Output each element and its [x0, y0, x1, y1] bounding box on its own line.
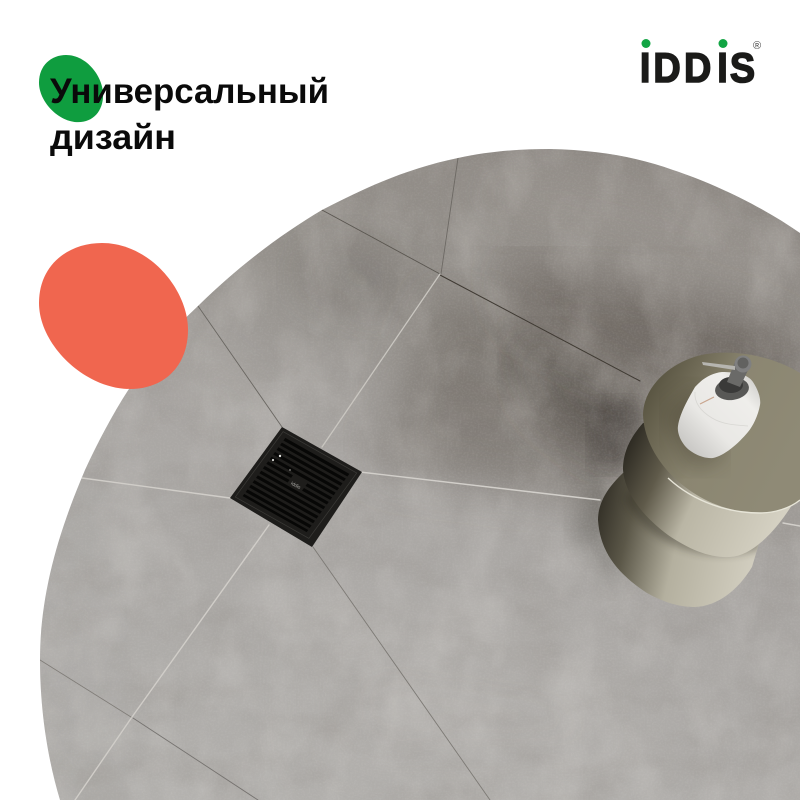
registered mark: ®	[753, 40, 761, 52]
tile joints	[40, 158, 800, 800]
soap dispenser bottle	[678, 356, 760, 458]
concrete texture	[74, 378, 709, 800]
decorative coral blob	[39, 243, 188, 389]
pump stem	[727, 359, 750, 387]
title: дизайн	[50, 118, 176, 157]
drain logo: iddis	[290, 481, 302, 491]
title: Универсальный	[50, 72, 329, 111]
stool lower body	[598, 472, 758, 607]
decorative green blob	[39, 55, 103, 122]
logo: IDDIS: IDDIS	[640, 45, 755, 91]
icon: black square floor drain	[230, 427, 362, 547]
stool middle body	[623, 420, 800, 557]
pump collar	[714, 376, 750, 402]
shadow zones on floor	[304, 237, 800, 586]
logo green dots	[642, 39, 728, 48]
stool	[590, 350, 800, 615]
pump head	[734, 356, 752, 372]
stool top disc	[640, 350, 800, 515]
pump nozzle	[702, 362, 735, 370]
bottle body	[678, 372, 760, 458]
title	[50, 72, 329, 157]
